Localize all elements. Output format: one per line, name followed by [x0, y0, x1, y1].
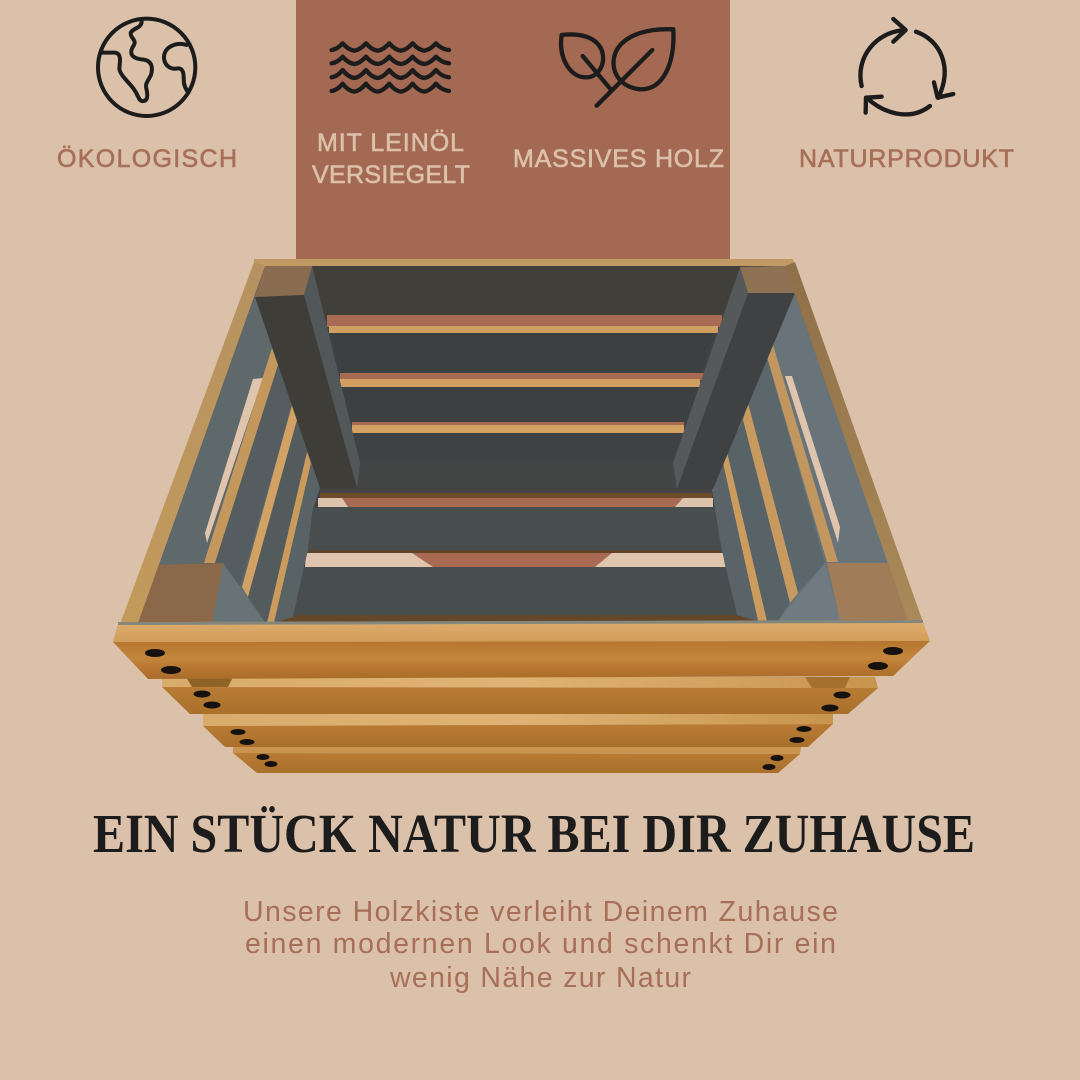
- left corner post: [255, 266, 360, 488]
- panel: terracotta header block: [296, 0, 730, 259]
- body text: einen modernen Look und schenkt Dir ein: [245, 928, 836, 960]
- right corner post: [673, 266, 795, 489]
- icon: globe: [98, 19, 195, 116]
- right wall: [712, 266, 908, 621]
- label: Massives Holz: MASSIVES HOLZ: [513, 145, 724, 173]
- wooden crate: [113, 259, 930, 773]
- screws: [145, 647, 903, 770]
- plank 4: [233, 747, 801, 773]
- label: Mit Leinöl versiegelt: MIT LEINÖL: [317, 129, 464, 157]
- heading: EIN STÜCK NATUR BEI DIR ZUHAUSE: [93, 803, 975, 864]
- top rim: [120, 259, 923, 624]
- label: Mit Leinöl versiegelt: VERSIEGELT: [312, 161, 470, 189]
- icon: recycle arrows: [860, 19, 953, 114]
- body text: wenig Nähe zur Natur: [389, 962, 692, 994]
- label: Naturprodukt: NATURPRODUKT: [799, 145, 1014, 173]
- left wall: [138, 266, 360, 623]
- icon: waves: [332, 43, 449, 92]
- label: Ökologisch: ÖKOLOGISCH: [57, 145, 237, 173]
- plank 2: [162, 677, 878, 714]
- plank 3: [203, 714, 833, 747]
- body text: Unsere Holzkiste verleiht Deinem Zuhause: [243, 896, 838, 928]
- body text: [243, 896, 838, 994]
- label: Mit Leinöl versiegelt: [312, 129, 470, 189]
- plank 1 front: [113, 620, 930, 679]
- crate interior: back wall and floor: [140, 262, 905, 622]
- icon: leaves: [561, 29, 673, 106]
